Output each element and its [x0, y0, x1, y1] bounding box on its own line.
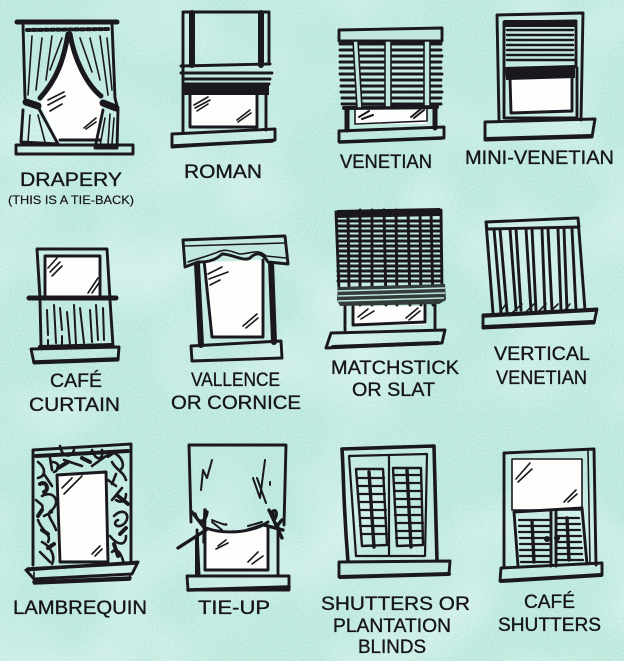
icon: cafe shutters window: [500, 449, 602, 581]
icon: venetian blind window: [339, 28, 444, 142]
panel: roman: [172, 12, 275, 183]
icon: matchstick blind window: [326, 208, 446, 348]
label: mini-venetian: MINI-VENETIAN: [465, 148, 614, 169]
label: tie-up: TIE-UP: [198, 598, 270, 619]
panel: tie-up: [178, 445, 289, 619]
label: roman: ROMAN: [184, 162, 262, 183]
label: or slat: OR SLAT: [352, 380, 435, 401]
icon: drapery window: [16, 22, 133, 154]
panel: drapery: [8, 22, 134, 207]
label: venetian: VENETIAN: [340, 152, 432, 173]
icon: cafe curtain window: [29, 249, 119, 363]
label: shutters or: SHUTTERS OR: [321, 594, 470, 615]
icon: lambrequin window: [26, 444, 138, 584]
panel: matchstick or slat: [326, 208, 459, 401]
panel: cafe curtain: [29, 249, 120, 416]
label: cafe: CAFÉ: [50, 371, 102, 392]
icon: vertical blind window: [483, 218, 597, 328]
icon: tie-up shade window: [178, 445, 289, 590]
label: blinds: BLINDS: [358, 637, 426, 658]
icon: roman shade window: [172, 12, 275, 147]
label: cafe (shutters): CAFÉ: [524, 592, 575, 613]
panel: shutters or plantation blinds: [321, 446, 470, 658]
label: vallence: VALLENCE: [191, 370, 280, 391]
label: shutters: SHUTTERS: [498, 615, 601, 636]
panel: lambrequin: [13, 444, 147, 619]
panel: vallence or cornice: [171, 236, 301, 414]
label: curtain: CURTAIN: [29, 395, 120, 416]
icon: mini-venetian blind window: [485, 13, 595, 140]
label: tie-back note: (THIS IS A TIE-BACK): [8, 193, 134, 207]
label: matchstick: MATCHSTICK: [331, 358, 459, 379]
label: or cornice: OR CORNICE: [171, 393, 301, 414]
label: plantation: PLANTATION: [333, 616, 451, 637]
label: venetian (vertical): VENETIAN: [496, 368, 587, 389]
label: vertical: VERTICAL: [494, 344, 590, 365]
label: drapery: DRAPERY: [20, 170, 122, 191]
panel: vertical venetian: [483, 218, 597, 389]
icon: plantation shutters window: [339, 446, 450, 577]
panel: cafe shutters: [498, 449, 602, 636]
label: lambrequin: LAMBREQUIN: [13, 598, 147, 619]
panel: venetian: [339, 28, 444, 173]
panel: mini-venetian: [465, 13, 614, 169]
icon: vallence window: [183, 236, 288, 361]
